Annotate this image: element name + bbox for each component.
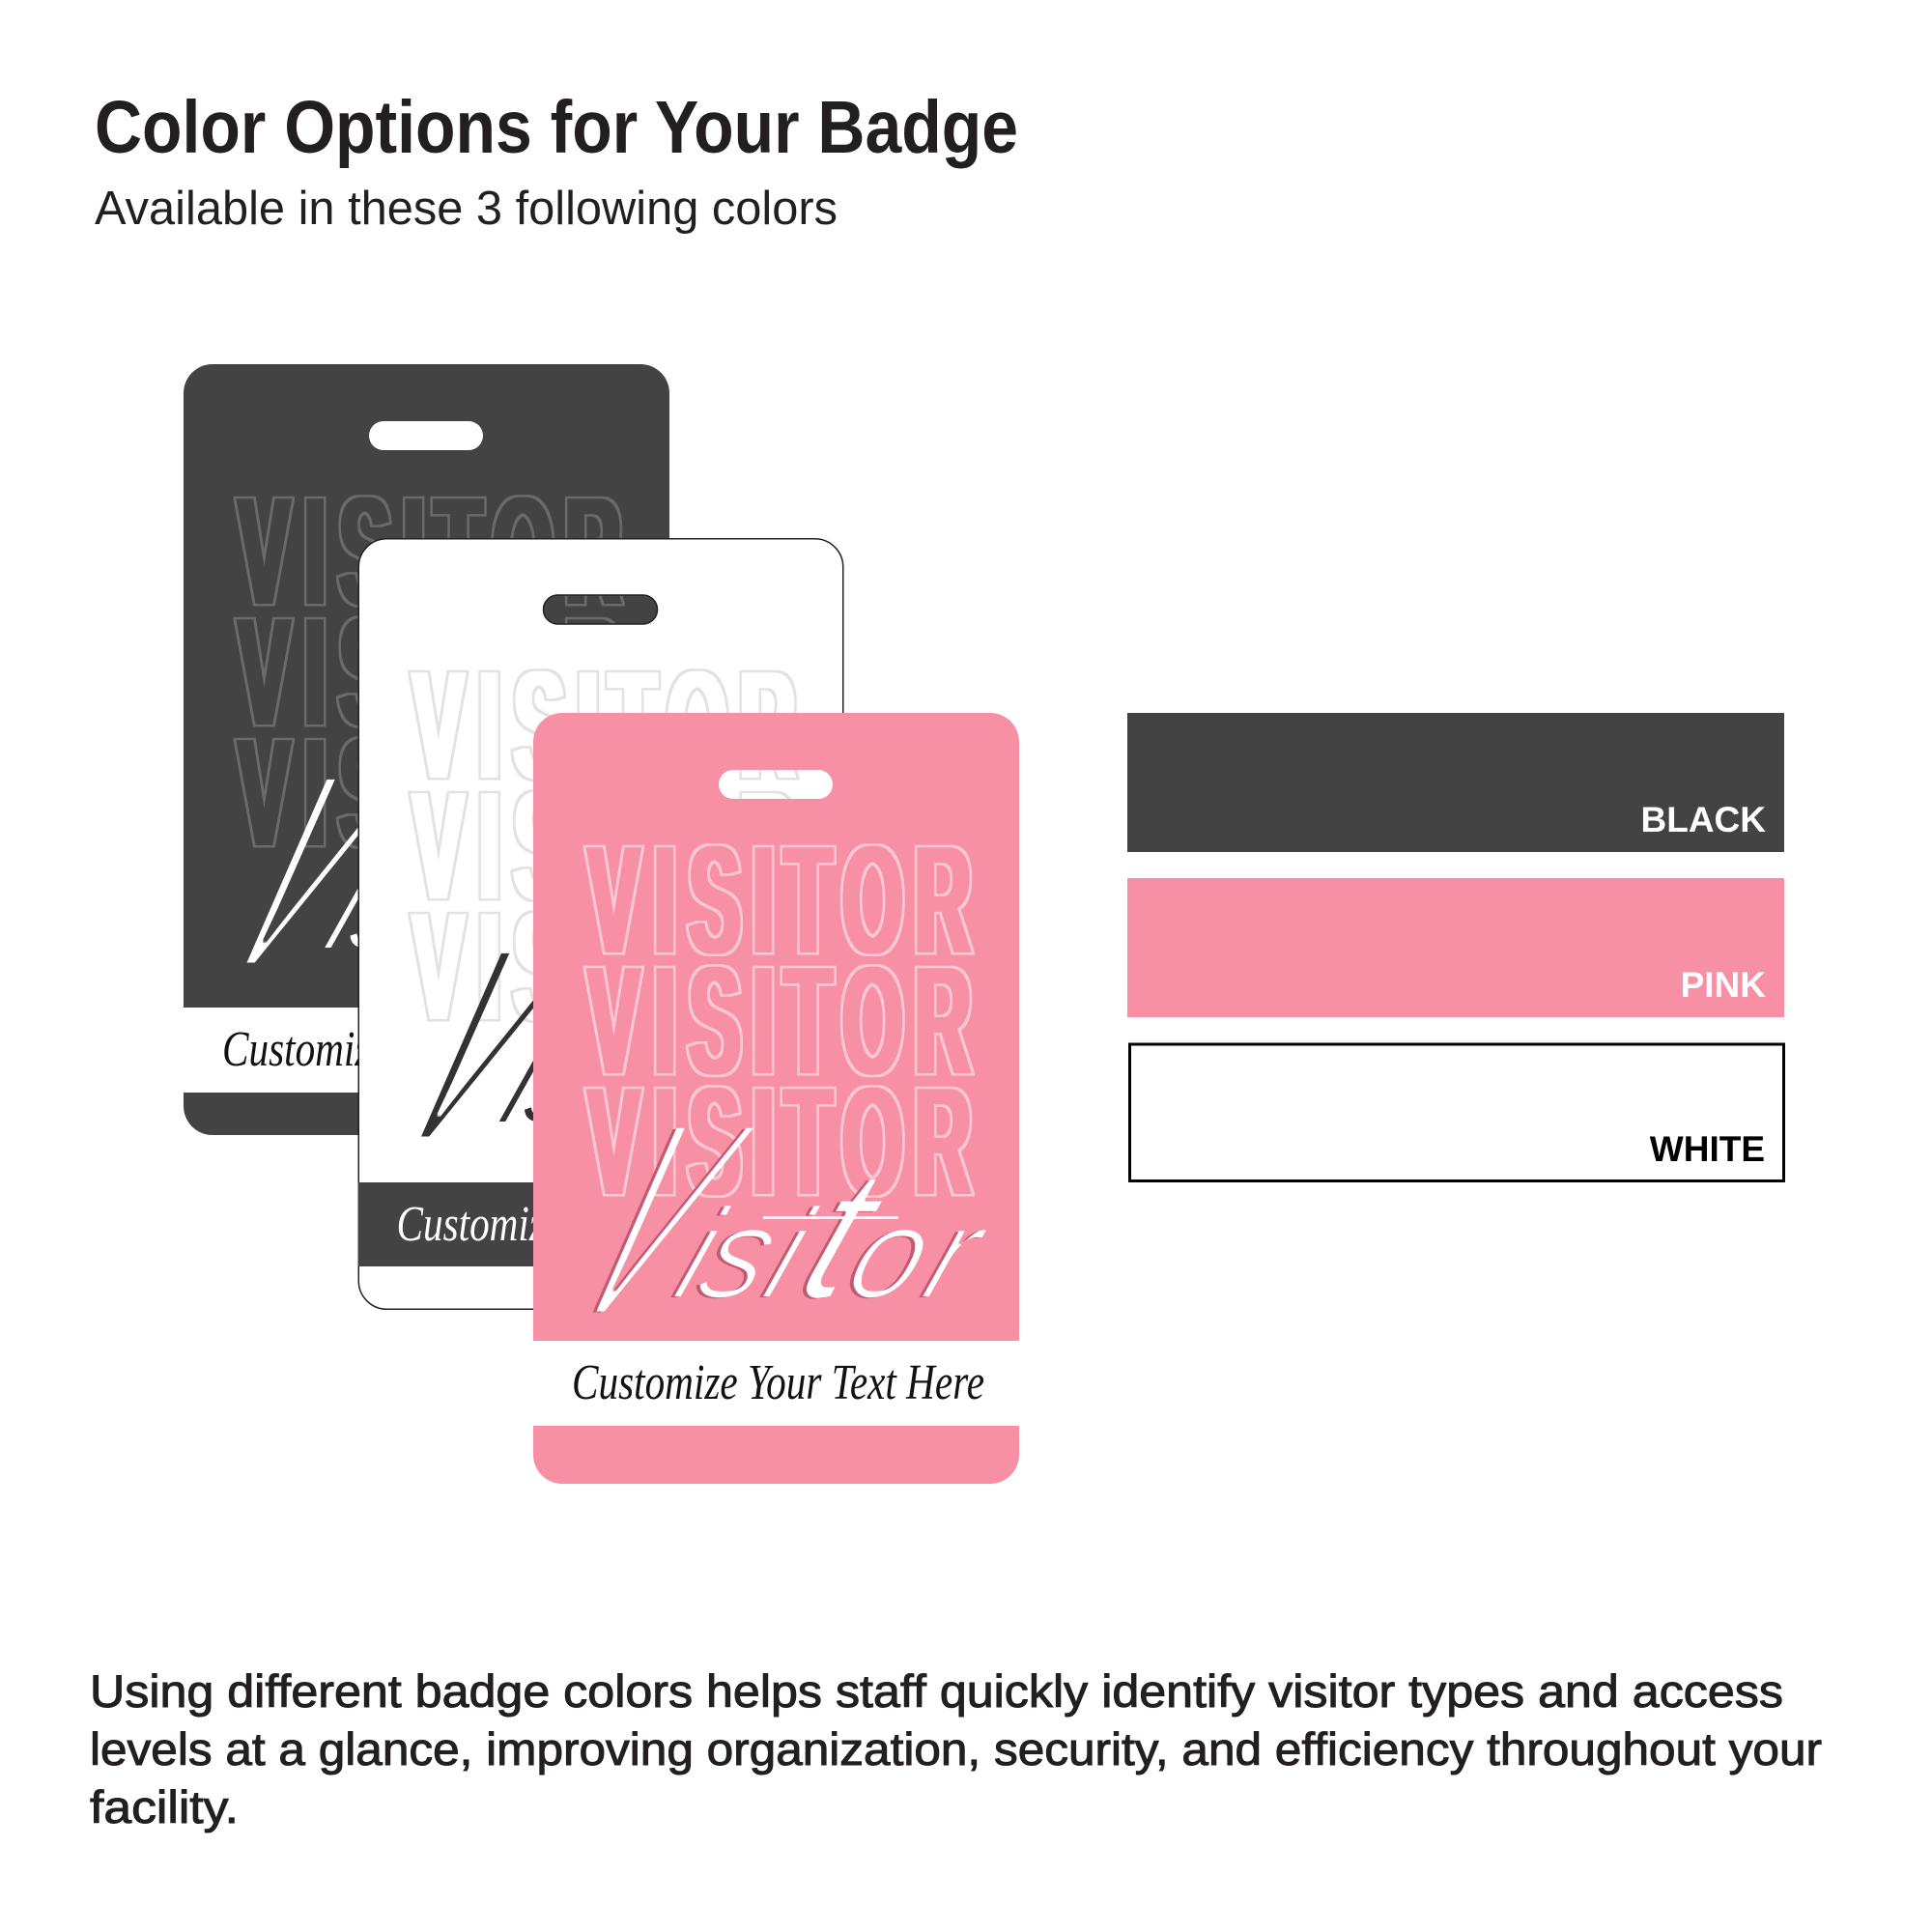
- badge: pink: i: [660, 1182, 743, 1324]
- description paragraph: levels at a glance, improving organization, security, and efficiency throughout your: [90, 1724, 1822, 1776]
- swatch: black: [1127, 713, 1784, 852]
- badge: black: t: [428, 782, 561, 988]
- badge: white: o: [655, 1008, 778, 1150]
- badge: pink: i: [749, 1182, 832, 1324]
- badge: black: Customize Your Text Here: [222, 1022, 635, 1077]
- badge: white: VISITOR: [412, 759, 796, 932]
- badge: pink: r: [908, 1182, 1007, 1324]
- badge: white: i: [484, 1008, 568, 1150]
- badge: white: [347, 539, 850, 1309]
- badge: pink: VISITOR: [587, 934, 971, 1107]
- swatch: pink: [1127, 878, 1784, 1017]
- badge: black: VISITOR: [238, 465, 621, 638]
- badge: white: Customize Your Text Here: [396, 1197, 810, 1252]
- badge: black: V: [172, 720, 444, 1022]
- badge: pink: VISITOR: [587, 1055, 971, 1228]
- badge: pink: VISITOR: [587, 813, 971, 986]
- badge: pink: o: [831, 1182, 953, 1324]
- badge: black: i: [310, 834, 393, 976]
- badge: white: s: [507, 1008, 623, 1150]
- badge: white: VISITOR: [412, 880, 796, 1053]
- badge: black: r: [558, 834, 657, 976]
- badge: white: VISITOR: [412, 639, 796, 811]
- swatch: white: [1130, 1044, 1783, 1180]
- description paragraph: [90, 1666, 1822, 1833]
- description paragraph: facility.: [90, 1782, 239, 1833]
- badge: white: i: [573, 1008, 657, 1150]
- badge: pink: [522, 713, 1025, 1484]
- description paragraph: Using different badge colors helps staff quickly identify visitor types and access: [90, 1666, 1783, 1718]
- badge: pink: Customize Your Text Here: [572, 1355, 984, 1410]
- title: Color Options for Your Badge: [95, 86, 1018, 169]
- subtitle: Available in these 3 following colors: [95, 183, 838, 235]
- swatch: white: WHITE: [1650, 1129, 1765, 1169]
- badge: pink: V: [522, 1068, 794, 1371]
- badge: pink: s: [683, 1182, 798, 1324]
- badge: black: VISITOR: [238, 706, 621, 879]
- badge: black: s: [333, 834, 448, 976]
- badge: black: VISITOR: [238, 585, 621, 758]
- badge: white: V: [347, 894, 618, 1196]
- swatch: black: BLACK: [1641, 800, 1766, 839]
- badge: black: o: [481, 834, 604, 976]
- badge: black: i: [399, 834, 482, 976]
- badge: white: r: [732, 1008, 831, 1150]
- badge: black: [172, 364, 675, 1135]
- swatch: pink: PINK: [1681, 965, 1766, 1005]
- badge: pink: t: [778, 1131, 911, 1337]
- badge: white: t: [603, 956, 735, 1162]
